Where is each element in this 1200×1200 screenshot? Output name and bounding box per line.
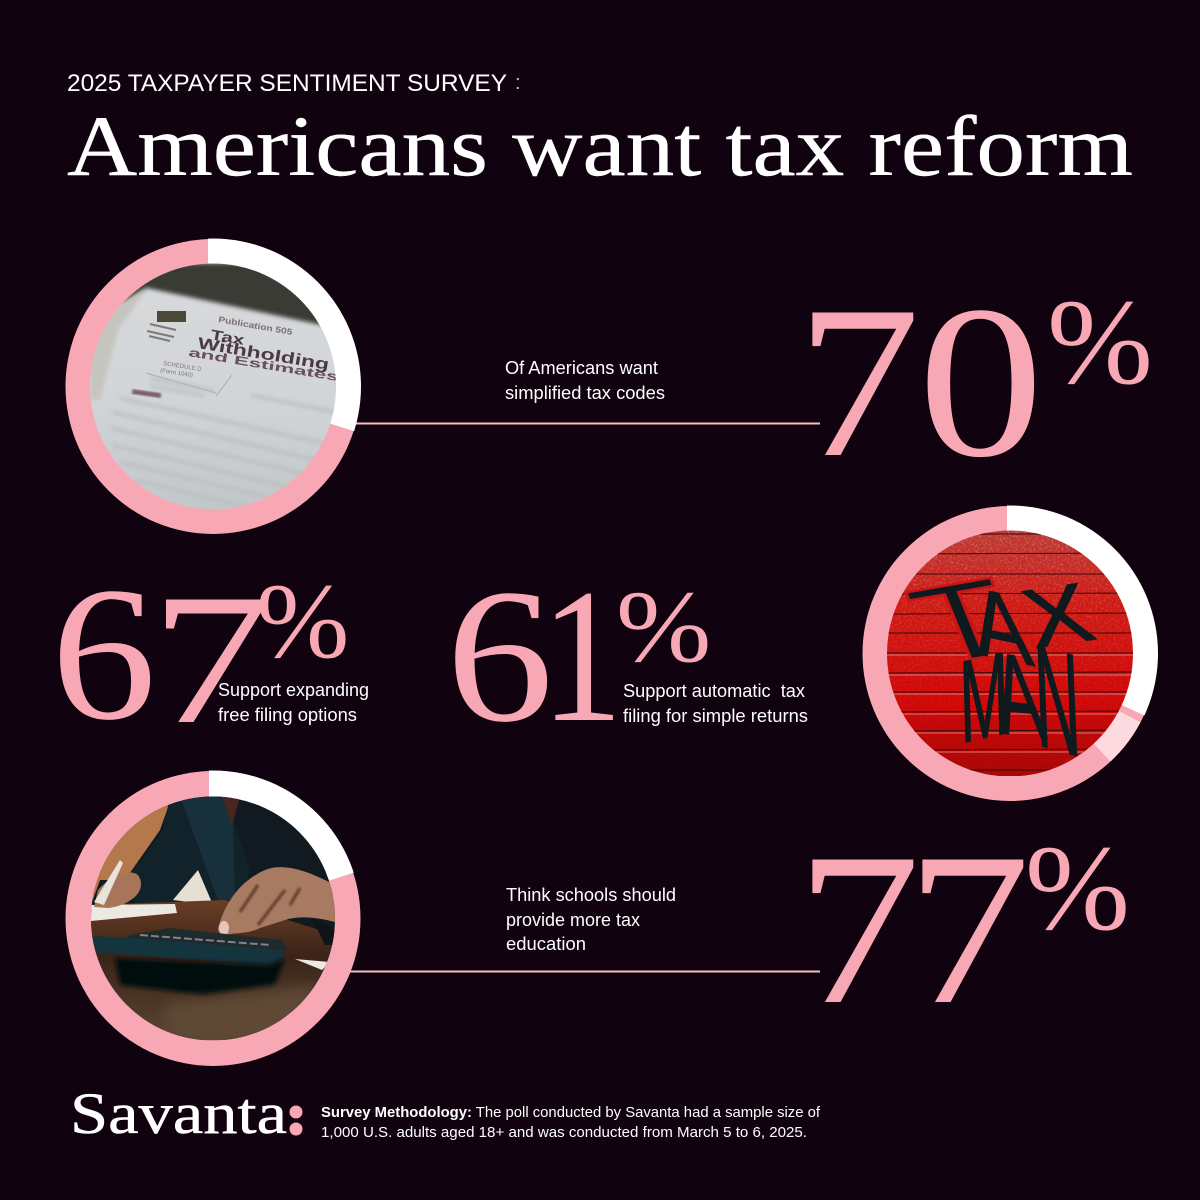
graffiti lettering: A: [984, 629, 1052, 763]
connector line: 70 percent: [352, 422, 820, 424]
stat: 67 percent: [51, 548, 349, 763]
form text: Publication 505: [218, 314, 294, 337]
stat: 77 percent: %: [1025, 821, 1130, 956]
panel: 70 percent simplified tax codes: [65, 238, 1153, 534]
graffiti lettering: N: [1032, 612, 1083, 788]
caption: 67 percent: free filing options: [218, 705, 357, 725]
graffiti lettering: X: [1013, 566, 1104, 666]
survey methodology note: 1,000 U.S. adults aged 18+ and was conducted from March 5 to 6, 2025.: [321, 1124, 807, 1141]
form text: Withholding: [196, 335, 330, 374]
form text: (Form 1040): [160, 368, 193, 379]
stat: 70 percent: 0: [918, 262, 1044, 502]
title: Americans want tax reform: [67, 98, 1133, 194]
stat: 77 percent: [796, 808, 1130, 1049]
caption: 77 percent: [506, 885, 676, 954]
stat: 61 percent: [446, 550, 711, 762]
donut chart: 77 percent: [65, 770, 361, 1066]
stat: 67 percent: 6: [51, 548, 156, 760]
stat: 70 percent: 7: [796, 261, 920, 502]
caption: 70 percent: Of Americans want: [505, 358, 658, 378]
graffiti lettering: A: [962, 564, 1040, 687]
caption: 70 percent: [505, 358, 665, 403]
survey methodology note: Survey Methodology: The poll conducted by Savanta had a sample size of: [321, 1104, 821, 1121]
form seal: [147, 311, 186, 341]
stat: 70 percent: %: [1047, 274, 1153, 409]
stat: 77 percent: 7: [906, 808, 1030, 1049]
eyebrow heading: :: [515, 72, 521, 94]
caption: 61 percent: filing for simple returns: [623, 706, 808, 726]
caption: 70 percent: simplified tax codes: [505, 383, 665, 403]
stat: 77 percent: 7: [796, 808, 920, 1049]
donut chart: 61 percent: [862, 506, 1158, 802]
caption: 67 percent: [218, 680, 369, 725]
connector line: 77 percent: [350, 970, 820, 972]
stat: 61 percent: 1: [541, 550, 623, 762]
donut chart: 70 percent: [65, 238, 361, 534]
photo: calculator: [91, 796, 335, 1040]
form text: [160, 316, 336, 380]
caption: 67 percent: Support expanding: [218, 680, 369, 700]
caption: 77 percent: provide more tax: [506, 910, 640, 930]
panel: 61 percent automatic filing: [446, 506, 1158, 802]
graffiti lettering: [904, 576, 1098, 757]
caption: 61 percent: [623, 681, 808, 726]
eyebrow heading: 2025 TAXPAYER SENTIMENT SURVEY: [67, 70, 507, 97]
stat: 61 percent: %: [616, 569, 711, 684]
stat: 67 percent: 7: [150, 555, 271, 763]
graffiti lettering: T: [893, 554, 1033, 689]
form text: and Estimates: [188, 345, 340, 384]
graffiti lettering: M: [958, 628, 1010, 768]
panel: 67 percent free filing: [51, 548, 369, 763]
caption: 77 percent: Think schools should: [506, 885, 676, 905]
caption: 61 percent: Support automatic tax: [623, 681, 805, 701]
panel: 77 percent tax education: [65, 770, 1130, 1066]
logo: Savanta: Savanta: [70, 1081, 287, 1146]
form text: Tax: [209, 326, 246, 348]
stat: 67 percent: %: [256, 561, 349, 680]
caption: 77 percent: education: [506, 934, 586, 954]
form text: SCHEDULE D: [163, 361, 202, 373]
stat: 61 percent: 6: [446, 551, 553, 762]
photo: tax form: [90, 263, 340, 510]
photo: tax man graffiti: [887, 530, 1133, 788]
survey methodology note: [321, 1104, 821, 1141]
stat: 70 percent: [796, 261, 1153, 502]
